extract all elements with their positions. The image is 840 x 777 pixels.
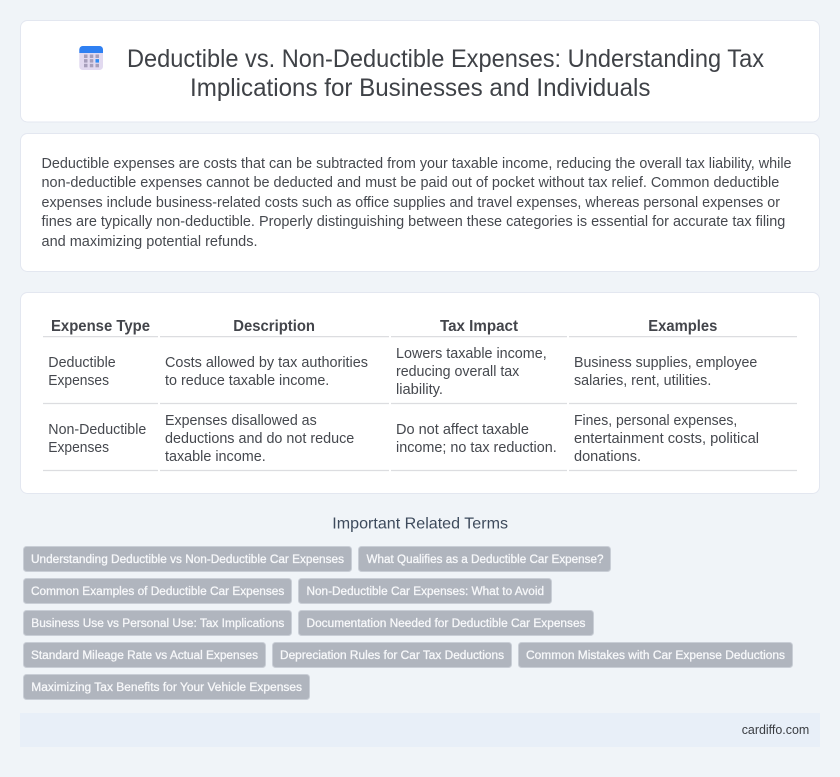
table header row: [51, 318, 717, 335]
tag: Understanding Deductible vs Non-Deductible Car Expenses: [31, 552, 344, 566]
table row: non-deductible expenses: donations.: [574, 449, 641, 465]
table row: non-deductible expenses: Non-Deductible: [48, 422, 146, 438]
text block: summary: and maximizing potential refunds.: [42, 234, 258, 250]
table row: deductible expenses: liability.: [396, 382, 443, 398]
tag: [24, 642, 266, 668]
tag: [272, 642, 512, 668]
table header row: Description: [233, 318, 315, 335]
table row: non-deductible expenses: Fines, personal expenses,: [574, 413, 737, 429]
table row: non-deductible expenses: taxable income.: [165, 449, 266, 465]
tag: Non-Deductible Car Expenses: What to Avoid: [306, 584, 544, 598]
tag: [24, 578, 292, 604]
tag: Common Mistakes with Car Expense Deductions: [526, 648, 785, 662]
table row: deductible expenses: Lowers taxable income,: [396, 346, 547, 362]
title: [127, 45, 764, 102]
tag: Common Examples of Deductible Car Expenses: [31, 584, 284, 598]
table row: non-deductible expenses: income; no tax reduction.: [396, 440, 557, 456]
table row: non-deductible expenses: Do not affect taxable: [396, 422, 529, 438]
tag: [518, 642, 792, 668]
table row: non-deductible expenses: [48, 413, 759, 465]
table row: non-deductible expenses: Expenses disallowed as: [165, 413, 317, 429]
tag list: related terms: [24, 546, 792, 700]
tag: [358, 546, 610, 572]
table header row: Expense Type: [51, 318, 150, 335]
table header row: Examples: [648, 318, 717, 335]
text block: summary: fines are typically non-deductible. Properly distinguishing between these categories is essential for accurate tax filing: [42, 214, 785, 230]
tag: Business Use vs Personal Use: Tax Implications: [31, 616, 284, 630]
panel: header: [20, 20, 820, 122]
panel: comparison table: [20, 292, 820, 494]
heading: important related terms: Important Related Terms: [332, 516, 508, 532]
footer text: cardiffo.com: [742, 723, 809, 737]
tag: [298, 578, 552, 604]
table header row: Tax Impact: [440, 318, 518, 335]
tag: [298, 610, 594, 636]
table row: deductible expenses: Costs allowed by tax authorities: [165, 355, 368, 371]
text block: summary: non-deductible expenses cannot be deducted and must be paid out of pocket without tax relief. Common deductible: [42, 175, 779, 191]
title: Deductible vs. Non-Deductible Expenses: Understanding Tax: [127, 45, 764, 73]
panel: summary paragraph: [20, 134, 820, 272]
text block: summary: [42, 156, 792, 250]
tag: [24, 610, 292, 636]
table row: non-deductible expenses: entertainment costs, political: [574, 431, 759, 447]
table row: deductible expenses: Expenses: [48, 373, 109, 389]
tag: Documentation Needed for Deductible Car Expenses: [306, 616, 586, 630]
tag: Depreciation Rules for Car Tax Deductions: [280, 648, 504, 662]
table row: deductible expenses: to reduce taxable income.: [165, 373, 329, 389]
tag: [24, 546, 352, 572]
icon: calendar: [79, 46, 103, 70]
table row: non-deductible expenses: deductions and do not reduce: [165, 431, 354, 447]
text block: summary: Deductible expenses are costs that can be subtracted from your taxable income, reducing the overall tax liability, while: [42, 156, 792, 172]
tag: [24, 674, 310, 700]
table row: deductible expenses: [48, 346, 757, 398]
tag: What Qualifies as a Deductible Car Expense?: [366, 552, 604, 566]
tag: Maximizing Tax Benefits for Your Vehicle Expenses: [31, 680, 302, 694]
title: Implications for Businesses and Individuals: [190, 74, 650, 102]
tag: Standard Mileage Rate vs Actual Expenses: [31, 648, 258, 662]
table row: non-deductible expenses: Expenses: [48, 440, 109, 456]
table row: deductible expenses: Business supplies, employee: [574, 355, 757, 371]
table row: deductible expenses: Deductible: [48, 355, 116, 371]
table row: deductible expenses: salaries, rent, utilities.: [574, 373, 711, 389]
text block: summary: expenses include business-related costs such as office supplies and travel expenses, whereas personal expenses or: [42, 195, 780, 211]
footer: [20, 713, 820, 747]
table row: deductible expenses: reducing overall tax: [396, 364, 520, 380]
